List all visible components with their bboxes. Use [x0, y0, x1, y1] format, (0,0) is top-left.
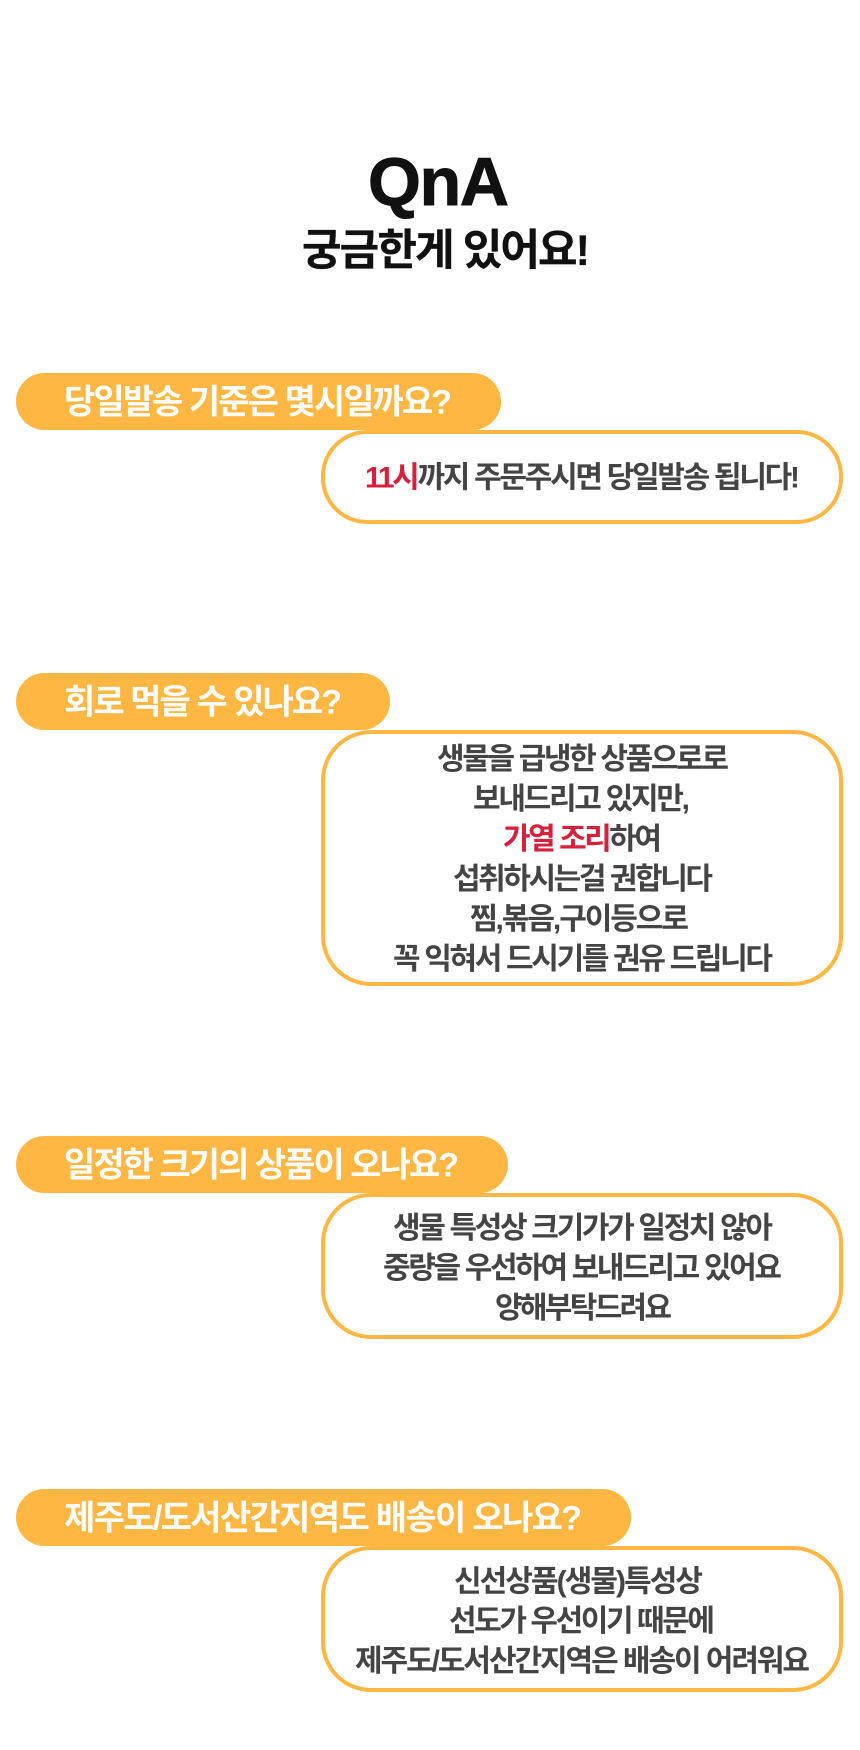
panel: question 1	[16, 373, 841, 522]
answer text 2	[393, 743, 773, 976]
title: QnA: QnA	[368, 144, 509, 220]
answer text 3: 양해부탁드려요	[495, 1292, 672, 1325]
answer text 3	[383, 1212, 782, 1325]
panel: question 4	[16, 1489, 841, 1690]
question pill 4	[16, 1489, 631, 1546]
answer box 1	[323, 432, 841, 522]
question text 1: 당일발송 기준은 몇시일까요?	[64, 384, 452, 422]
subtitle: 궁금한게 있어요!	[302, 227, 590, 275]
question text 2: 회로 먹을 수 있나요?	[64, 684, 342, 722]
question text 3: 일정한 크기의 상품이 오나요?	[64, 1146, 459, 1184]
question text 4: 제주도/도서산간지역도 배송이 오나요?	[64, 1500, 582, 1538]
answer text 1: 11시까지 주문주시면 당일발송 됩니다!	[365, 462, 800, 494]
answer text 4: 신선상품(생물)특성상	[454, 1566, 703, 1598]
answer text 3: 생물 특성상 크기가가 일정치 않아	[393, 1212, 773, 1245]
question pill 2	[16, 673, 390, 730]
panel: question 2	[16, 673, 841, 984]
question pill 3	[16, 1136, 508, 1193]
answer box 2	[323, 732, 841, 984]
answer text 3: 중량을 우선하여 보내드리고 있어요	[383, 1252, 782, 1285]
answer text 2: 찜,볶음,구이등으로	[470, 903, 689, 936]
answer text 2: 생물을 급냉한 상품으로로	[437, 743, 729, 776]
answer box 3	[323, 1195, 841, 1337]
question pill 1	[16, 373, 501, 430]
answer text 2: 보내드리고 있지만,	[473, 783, 690, 816]
answer text 4	[355, 1566, 810, 1678]
answer text 4: 제주도/도서산간지역은 배송이 어려워요	[355, 1645, 810, 1678]
answer box 4	[323, 1548, 841, 1690]
panel: question 3	[16, 1136, 841, 1337]
answer text 4: 선도가 우선이기 때문에	[449, 1605, 715, 1638]
answer text 2: 섭취하시는걸 권합니다	[453, 863, 713, 896]
answer text 2: 꼭 익혀서 드시기를 권유 드립니다	[393, 943, 773, 976]
answer text 2: 가열 조리하여	[503, 823, 662, 856]
